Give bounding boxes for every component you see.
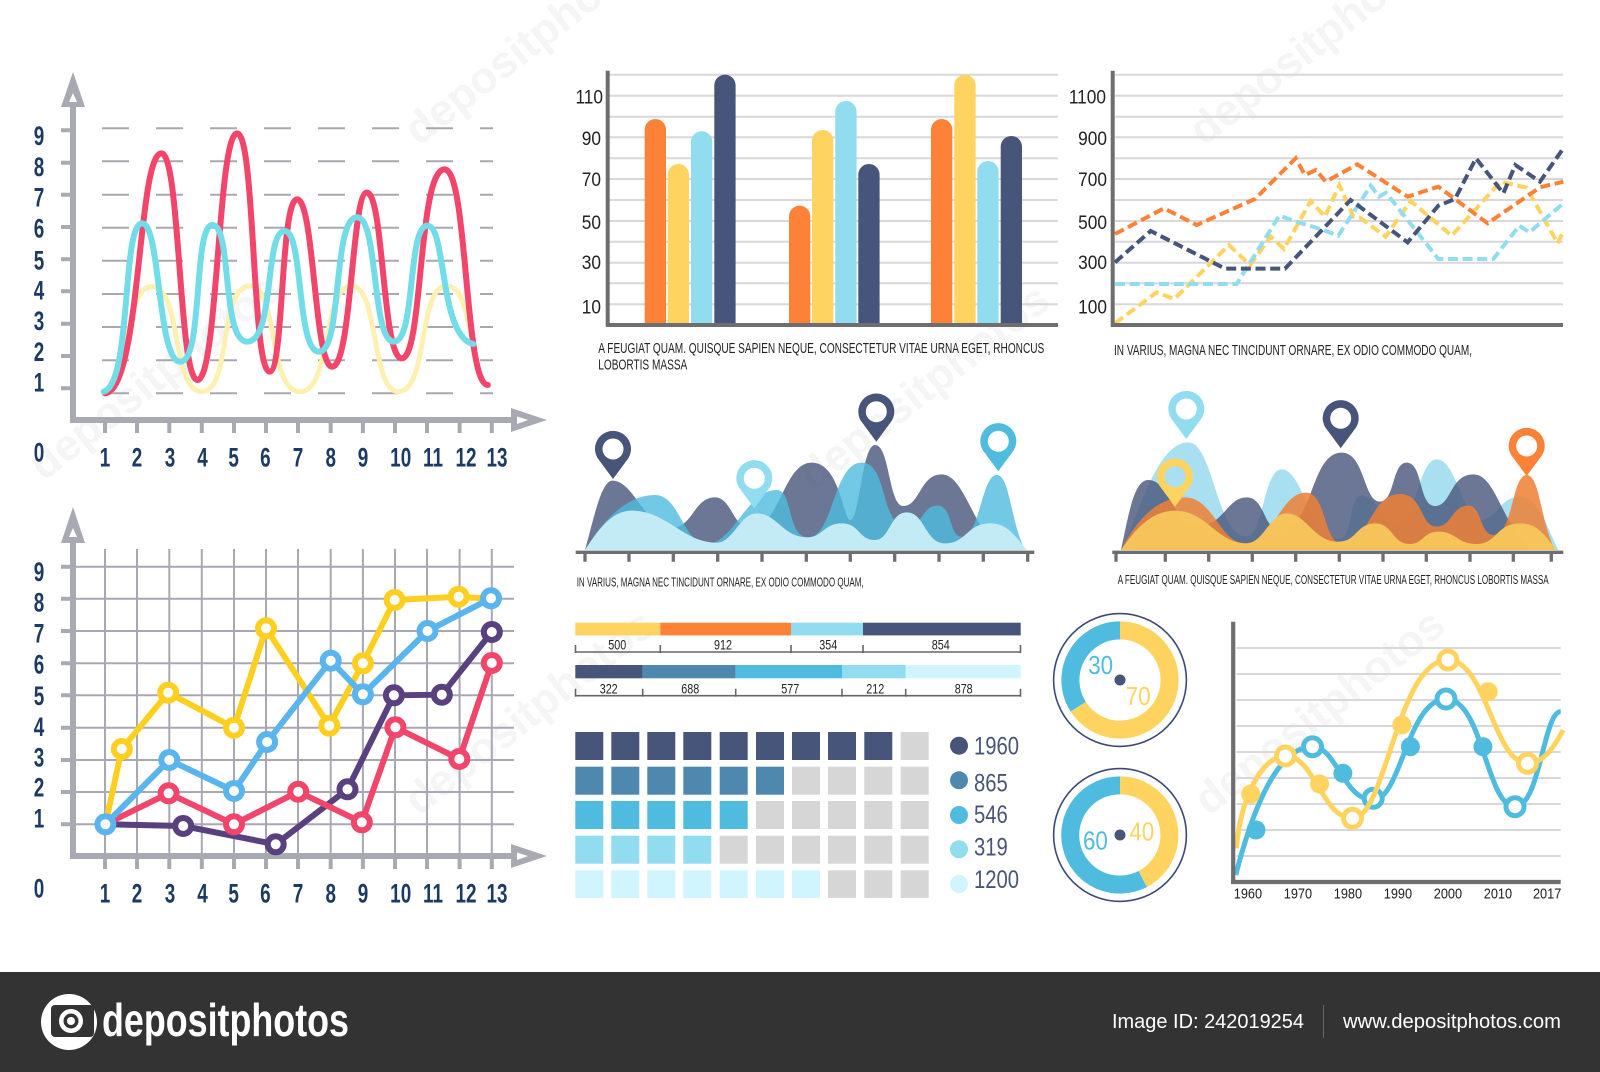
donut: 60 / 40: 40 xyxy=(1129,818,1154,847)
x axis numbers: 2 xyxy=(132,878,142,908)
icon: camera logo xyxy=(41,994,97,1050)
axes with arrows xyxy=(61,507,547,869)
y axis numbers: 4 xyxy=(34,712,44,742)
series: yellow xyxy=(105,589,491,824)
curve: pale yellow xyxy=(105,286,471,393)
y axis numbers: 3 xyxy=(34,306,44,336)
panel: stacked bar two: 878 xyxy=(955,681,973,697)
y axis numbers: 1 xyxy=(34,803,44,833)
panel: blue area chart with pins xyxy=(576,394,1034,590)
axis labels: 1100 xyxy=(1069,87,1106,108)
caption: LOBORTIS MASSA xyxy=(598,356,687,374)
panel: dashed line chart xyxy=(1069,71,1563,359)
legend: 1960 xyxy=(974,731,1019,760)
x axis numbers: 11 xyxy=(423,442,443,472)
areas xyxy=(1121,442,1558,550)
x axis numbers: 3 xyxy=(165,878,175,908)
legend: 546 xyxy=(974,800,1008,828)
x axis numbers: 9 xyxy=(358,878,368,908)
x axis numbers: 1 xyxy=(100,442,110,472)
year labels: 2010 xyxy=(1484,884,1512,902)
panel: wave line chart xyxy=(34,72,547,472)
row five xyxy=(575,870,929,898)
y axis numbers: 2 xyxy=(34,772,44,802)
year labels: 1980 xyxy=(1334,884,1362,902)
caption xyxy=(598,340,1044,374)
y axis numbers: 8 xyxy=(34,152,44,182)
y axis numbers: 4 xyxy=(34,275,44,305)
series: purple xyxy=(105,624,500,852)
row three xyxy=(575,801,929,829)
year labels xyxy=(1234,884,1562,902)
legend: 865 xyxy=(974,768,1008,797)
watermarks xyxy=(20,0,1454,825)
y axis numbers: 5 xyxy=(34,681,44,711)
x axis numbers: 9 xyxy=(358,442,368,472)
year labels: 2017 xyxy=(1533,884,1562,902)
panel: stacked bar two: 212 xyxy=(866,681,884,697)
y axis numbers: 6 xyxy=(34,213,44,243)
watermarks: depositphotos xyxy=(20,264,289,490)
yellow curve xyxy=(1236,660,1563,848)
x axis numbers: 13 xyxy=(486,878,508,908)
donut: 30 / 70: 30 xyxy=(1088,651,1113,680)
bars: group one xyxy=(645,75,736,323)
axis labels: 500 xyxy=(1078,212,1107,233)
website: www.depositphotos.com xyxy=(1342,1010,1561,1033)
axis labels: 30 xyxy=(582,252,601,273)
bars: group two xyxy=(789,101,880,323)
donut: 60 / 40 xyxy=(1054,769,1186,901)
y axis numbers xyxy=(34,557,44,903)
panel: stacked bar one: 354 xyxy=(819,637,837,653)
axis labels: 10 xyxy=(582,297,601,318)
donut: 30 / 70 xyxy=(1054,614,1186,746)
axis labels: 50 xyxy=(582,212,601,233)
x axis numbers: 11 xyxy=(423,878,443,908)
x axis numbers: 12 xyxy=(455,878,477,908)
axis labels: 700 xyxy=(1078,169,1107,190)
panel: stacked bar two: 322 xyxy=(600,681,618,697)
axis labels: 900 xyxy=(1078,128,1107,149)
axis labels: 70 xyxy=(582,169,601,190)
yellow markers xyxy=(1241,651,1536,827)
caption: IN VARIUS, MAGNA NEC TINCIDUNT ORNARE, EX ODIO COMMODO QUAM, xyxy=(577,574,864,590)
x axis numbers: 8 xyxy=(325,442,336,472)
x axis numbers: 7 xyxy=(293,442,303,472)
legend xyxy=(950,731,1019,893)
row two xyxy=(575,767,929,795)
axis labels: 100 xyxy=(1078,297,1107,318)
baseline and ticks xyxy=(1112,552,1563,562)
x axis numbers: 13 xyxy=(486,442,508,472)
legend: 1200 xyxy=(974,865,1019,893)
x axis numbers: 4 xyxy=(197,442,208,472)
x axis numbers: 5 xyxy=(228,442,239,472)
caption: A FEUGIAT QUAM. QUISQUE SAPIEN NEQUE, CONSECTETUR VITAE URNA EGET, RHONCUS xyxy=(598,340,1044,357)
curve: red xyxy=(105,133,488,393)
x axis numbers xyxy=(100,878,508,908)
x axis numbers: 7 xyxy=(293,878,303,908)
panel: stacked bar two: 688 xyxy=(681,681,699,697)
axes xyxy=(1231,622,1561,884)
y axis numbers: 7 xyxy=(34,618,44,648)
panel: timeline curve chart xyxy=(1231,622,1563,902)
watermarks: depositphotos xyxy=(1185,599,1454,825)
y axis numbers xyxy=(34,121,44,467)
year labels: 1970 xyxy=(1284,884,1312,902)
legend: 319 xyxy=(974,832,1008,861)
pin: navy left xyxy=(595,431,631,479)
pin: light blue xyxy=(736,460,772,508)
axis labels: 300 xyxy=(1078,252,1107,273)
y axis numbers: 0 xyxy=(34,873,44,903)
year labels: 2000 xyxy=(1434,884,1462,902)
row one xyxy=(575,732,929,760)
axis labels: 110 xyxy=(575,87,603,108)
x axis numbers: 2 xyxy=(132,442,142,472)
brand name: depositphotos xyxy=(102,994,349,1046)
y axis numbers: 8 xyxy=(34,587,44,617)
series: blue xyxy=(97,590,499,832)
pin: light blue xyxy=(1168,391,1204,439)
blue markers xyxy=(1246,690,1524,840)
x axis numbers xyxy=(100,442,508,472)
footer bar xyxy=(0,972,1600,1072)
bars: group three xyxy=(931,75,1022,323)
x axis numbers: 5 xyxy=(228,878,239,908)
axes with arrows xyxy=(61,72,547,433)
x axis numbers: 10 xyxy=(390,442,411,472)
series: red xyxy=(105,655,500,832)
year labels: 1960 xyxy=(1234,884,1262,902)
axes xyxy=(1111,71,1563,327)
panel: stacked bar one xyxy=(575,623,1021,653)
y axis numbers: 7 xyxy=(34,182,44,212)
pin: orange xyxy=(1509,428,1545,476)
axis labels: 90 xyxy=(582,128,601,149)
y axis numbers: 5 xyxy=(34,245,44,275)
axes xyxy=(606,71,1058,327)
dashed series xyxy=(1115,148,1563,323)
x axis numbers: 8 xyxy=(325,878,336,908)
x axis numbers: 3 xyxy=(165,442,175,472)
y axis numbers: 2 xyxy=(34,337,44,367)
x axis numbers: 10 xyxy=(390,878,411,908)
panel: stacked bar one: 500 xyxy=(608,637,626,653)
areas xyxy=(585,445,1027,550)
baseline and ticks xyxy=(576,552,1034,562)
y axis numbers: 9 xyxy=(34,121,44,151)
row four xyxy=(575,836,929,864)
panel: stacked bar one: 912 xyxy=(714,637,732,653)
panel: marker line chart xyxy=(34,507,547,908)
blue curve xyxy=(1236,699,1561,875)
image id: Image ID: 242019254 xyxy=(1112,1010,1304,1033)
year labels: 1990 xyxy=(1384,884,1412,902)
y axis numbers: 9 xyxy=(34,557,44,587)
panel: stacked bar two: 577 xyxy=(781,681,799,697)
pin: navy top xyxy=(858,394,894,442)
x axis numbers: 1 xyxy=(100,878,110,908)
y axis numbers: 3 xyxy=(34,742,44,772)
x axis numbers: 6 xyxy=(260,878,271,908)
curve: cyan xyxy=(104,217,473,392)
x axis numbers: 6 xyxy=(260,442,271,472)
pin: yellow xyxy=(1157,459,1193,507)
donut: 60 / 40: 60 xyxy=(1083,827,1108,856)
panel: stacked bar two xyxy=(575,665,1021,697)
pin: navy xyxy=(1323,400,1359,448)
x axis numbers: 4 xyxy=(197,878,208,908)
watermarks: depositphotos xyxy=(790,274,1059,500)
panel: multicolour area chart with pins xyxy=(1112,391,1563,587)
axis labels xyxy=(575,87,603,318)
y axis numbers: 1 xyxy=(34,367,44,397)
x axis numbers: 12 xyxy=(455,442,477,472)
panel: grouped bar chart xyxy=(575,71,1058,373)
dashed gridlines xyxy=(102,128,493,393)
panel: waffle grid xyxy=(575,732,929,898)
axis labels xyxy=(1069,87,1107,318)
donut: 30 / 70: 70 xyxy=(1126,682,1151,711)
y axis numbers: 0 xyxy=(34,437,44,467)
grid xyxy=(61,549,514,856)
watermarks: depositphotos xyxy=(395,599,664,825)
pin: blue right xyxy=(980,423,1016,471)
y axis numbers: 6 xyxy=(34,649,44,679)
panel: stacked bar one: 854 xyxy=(932,637,950,653)
